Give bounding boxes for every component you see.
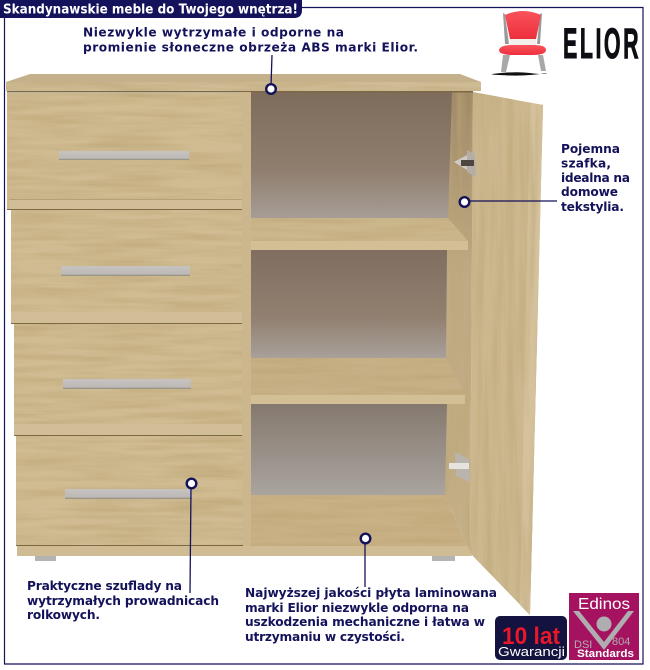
drawer 2 xyxy=(11,210,242,324)
callout: top edge: Niezwykle wytrzymałe i odporne na xyxy=(83,26,344,40)
badge: 10 year guarantee xyxy=(495,616,567,660)
callout: board: Najwyższej jakości płyta laminowana xyxy=(245,586,497,600)
door xyxy=(445,92,543,615)
callout: top edge xyxy=(83,26,418,94)
callout: board: utrzymaniu w czystości. xyxy=(245,630,405,644)
lower hinge xyxy=(449,452,470,482)
callout: cupboard: idealna na xyxy=(561,171,630,185)
callout: drawers: Praktyczne szuflady na xyxy=(27,579,182,593)
callout: top edge: promienie słoneczne obrzeża ABS marki Elior. xyxy=(83,40,418,54)
badge: 10 year guarantee: 10 lat xyxy=(502,623,560,650)
header banner: Skandynawskie meble do Twojego wnętrza! xyxy=(3,2,298,18)
callout: cupboard: domowe xyxy=(561,185,618,199)
logo: Elior: ELIOR xyxy=(563,20,641,68)
callout: drawers: wytrzymałych prowadnicach xyxy=(27,594,219,608)
icon: red chair xyxy=(492,11,547,76)
plinth xyxy=(17,546,472,556)
drawer 4 xyxy=(16,436,243,546)
callout: board xyxy=(245,534,497,644)
cabinet feet xyxy=(35,556,455,561)
badge: Edinos standards: DSI xyxy=(574,639,592,651)
drawer 3 xyxy=(14,324,242,436)
badge: 10 year guarantee: Gwarancji xyxy=(498,644,565,659)
callout: cupboard: szafka, xyxy=(561,156,611,170)
callout: drawers: rolkowych. xyxy=(27,608,100,622)
callout: board: uszkodzenia mechaniczne i łatwa w xyxy=(245,615,485,629)
callout: cupboard: Pojemna xyxy=(561,142,620,156)
drawer 1 xyxy=(7,93,242,210)
callout: cupboard: tekstylia. xyxy=(561,200,624,214)
callout: cupboard xyxy=(460,142,630,214)
badge: Edinos standards: Edinos xyxy=(578,596,630,613)
divider panel xyxy=(242,92,251,546)
callout: drawers xyxy=(27,479,219,622)
shelves xyxy=(251,218,468,546)
cabinet interior back xyxy=(251,92,456,497)
cabinet top panel xyxy=(6,74,481,92)
badge: Edinos standards: 804 xyxy=(612,636,630,648)
upper hinge xyxy=(454,150,476,177)
badge: Edinos standards: Standards xyxy=(577,648,634,660)
callout: board: marki Elior niezwykle odporna na xyxy=(245,601,469,615)
cabinet xyxy=(6,74,543,615)
badge: Edinos standards xyxy=(569,593,639,660)
